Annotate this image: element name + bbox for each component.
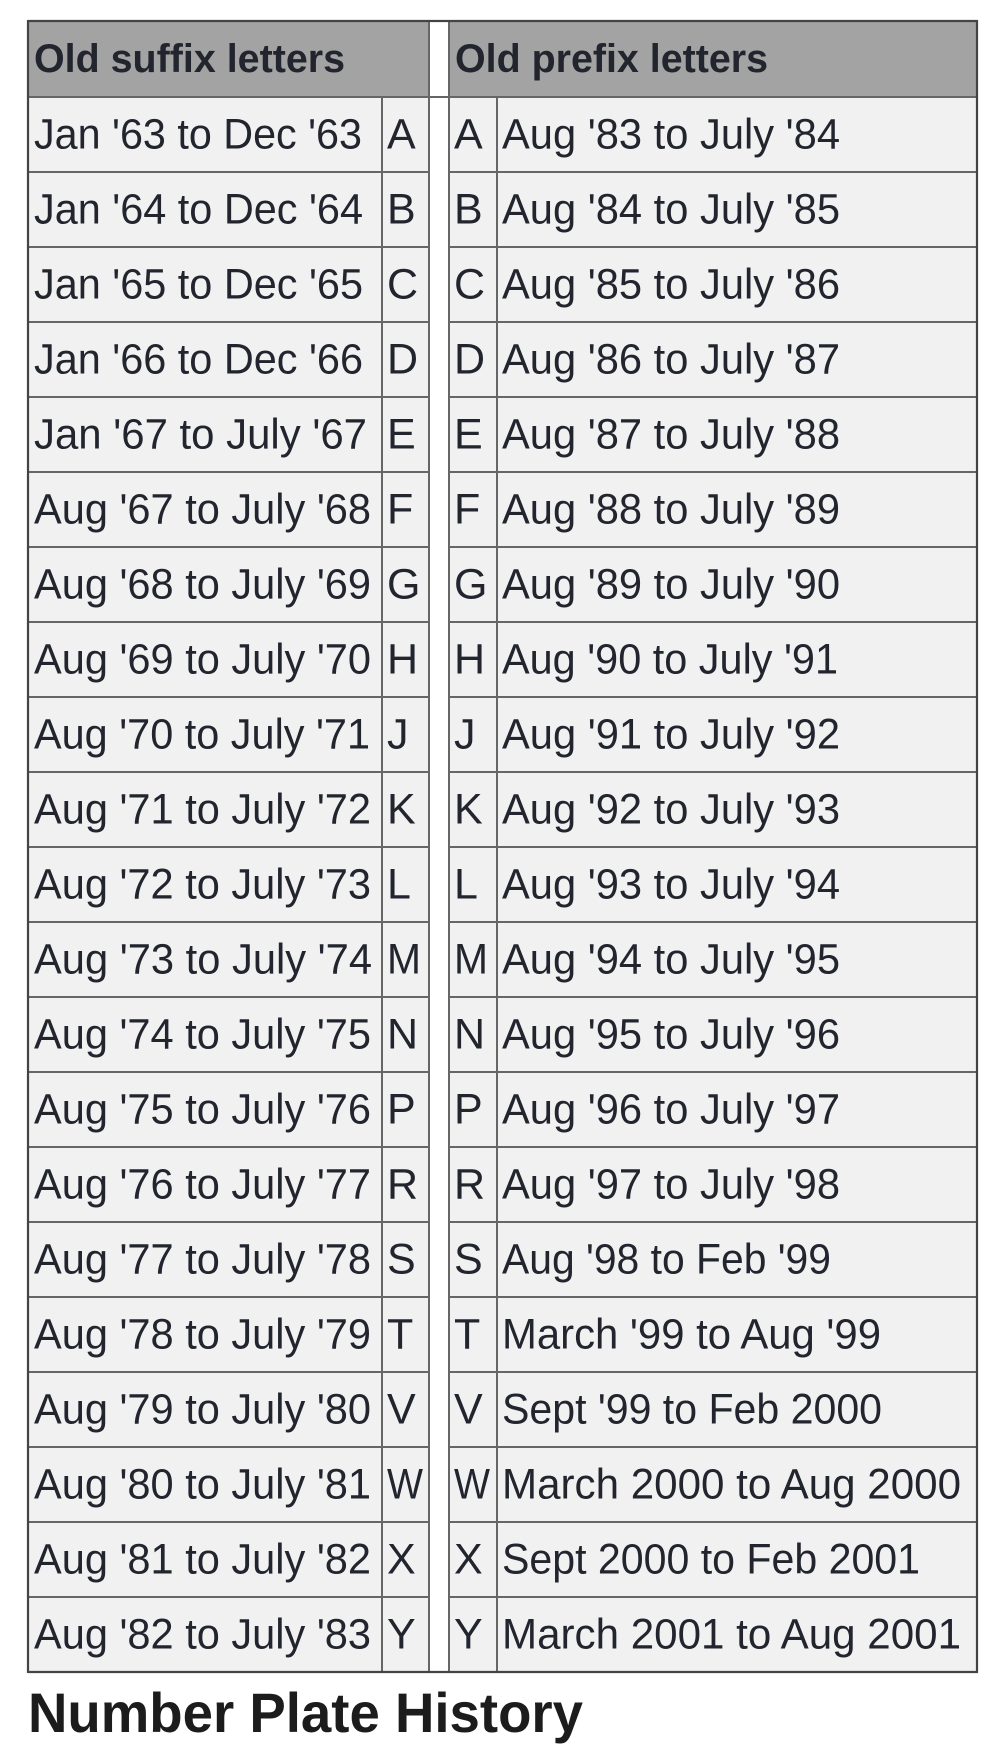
row: B: B [387,186,416,234]
row: N: Aug '74 to July '75 [34,1010,371,1058]
row: P [34,1086,840,1134]
row: A: Aug '83 to July '84 [502,110,840,158]
row: K [34,786,840,834]
row: F: F [387,486,413,534]
row: S: Aug '98 to Feb '99 [502,1236,831,1284]
row: T [34,1310,881,1358]
row: M: Aug '73 to July '74 [34,936,372,984]
row: K: Aug '71 to July '72 [34,786,371,834]
row: L: Aug '72 to July '73 [34,860,371,908]
row: T: March '99 to Aug '99 [502,1310,881,1358]
row: R: Aug '76 to July '77 [34,1160,371,1208]
row: N: N [387,1010,418,1058]
row: G: G [387,560,420,608]
row: Y: Aug '82 to July '83 [34,1610,371,1658]
row: D: Jan '66 to Dec '66 [34,336,363,384]
row: D: Aug '86 to July '87 [502,336,840,384]
row: J: J [387,710,408,758]
row: S [34,1236,831,1284]
row: E: E [387,410,416,458]
row: F [34,486,840,534]
heading: old suffix letters: Old suffix letters [34,37,345,81]
row: B: Aug '84 to July '85 [502,186,840,234]
row: C [34,260,840,308]
row: A: A [387,110,416,158]
row: H [34,636,838,684]
row: V [34,1386,882,1434]
title: Number Plate History [28,1681,583,1744]
row: K: K [387,786,416,834]
row: N: N [454,1010,485,1058]
row: Y: March 2001 to Aug 2001 [502,1610,961,1658]
row: C: Jan '65 to Dec '65 [34,260,363,308]
row: R: Aug '97 to July '98 [502,1160,840,1208]
row: W: March 2000 to Aug 2000 [502,1460,961,1508]
row: P: Aug '75 to July '76 [34,1086,371,1134]
row: X: X [387,1536,416,1584]
row: R [34,1160,840,1208]
row: C: C [454,260,485,308]
row: V: Sept '99 to Feb 2000 [502,1386,882,1434]
row: K: K [454,786,483,834]
row: N: Aug '95 to July '96 [502,1010,840,1058]
row: M: Aug '94 to July '95 [502,936,840,984]
row: X: Aug '81 to July '82 [34,1536,371,1584]
row: J: Aug '70 to July '71 [34,710,370,758]
row: H: H [387,636,418,684]
row: R: R [387,1160,418,1208]
row: P: P [387,1086,416,1134]
row: C: C [387,260,418,308]
row: S: Aug '77 to July '78 [34,1236,371,1284]
row: M: M [454,936,488,984]
row: S: S [387,1236,416,1284]
row: E: Jan '67 to July '67 [34,410,367,458]
row: V: V [387,1386,416,1434]
row: E [34,410,840,458]
row: X: X [454,1536,483,1584]
row: M: M [387,936,421,984]
row: F: Aug '67 to July '68 [34,486,371,534]
row: E: E [454,410,483,458]
row: T: T [454,1310,480,1358]
row: T: T [387,1310,413,1358]
row: H: H [454,636,485,684]
row: T: Aug '78 to July '79 [34,1310,371,1358]
row: G: Aug '89 to July '90 [502,560,840,608]
row: G: Aug '68 to July '69 [34,560,371,608]
row: D: D [454,336,485,384]
row: F: Aug '88 to July '89 [502,486,840,534]
row: R: R [454,1160,485,1208]
row: D [34,336,840,384]
row: W: Aug '80 to July '81 [34,1460,371,1508]
row: C: Aug '85 to July '86 [502,260,840,308]
row: P: P [454,1086,483,1134]
row: L: Aug '93 to July '94 [502,860,840,908]
row: J: J [454,710,476,758]
row: V: V [454,1386,483,1434]
row: J: Aug '91 to July '92 [502,710,840,758]
row: B [34,186,840,234]
row: G: G [454,560,487,608]
row: G [34,560,840,608]
row: Y [34,1610,961,1658]
row: M [34,936,840,984]
row: H: Aug '69 to July '70 [34,636,371,684]
row: E: Aug '87 to July '88 [502,410,840,458]
row: D: D [387,336,418,384]
row: B: B [454,186,483,234]
row: X [34,1536,920,1584]
row: L [34,860,840,908]
row: B: Jan '64 to Dec '64 [34,186,363,234]
row: A: Jan '63 to Dec '63 [34,110,362,158]
row: L: L [387,860,411,908]
row: A: A [454,110,483,158]
row: Y: Y [454,1610,483,1658]
heading: old prefix letters: Old prefix letters [455,37,768,81]
row: S: S [454,1236,483,1284]
row: V: Aug '79 to July '80 [34,1386,371,1434]
row: W: W [454,1460,490,1508]
row: H: Aug '90 to July '91 [502,636,838,684]
row: N [34,1010,840,1058]
row: W [34,1460,961,1508]
row: J [34,710,840,758]
row: P: Aug '96 to July '97 [502,1086,840,1134]
row: X: Sept 2000 to Feb 2001 [502,1536,920,1584]
row: Y: Y [387,1610,416,1658]
row: L: L [454,860,478,908]
row: W: W [387,1460,423,1508]
row: K: Aug '92 to July '93 [502,786,840,834]
row: A [34,110,840,158]
row: F: F [454,486,480,534]
